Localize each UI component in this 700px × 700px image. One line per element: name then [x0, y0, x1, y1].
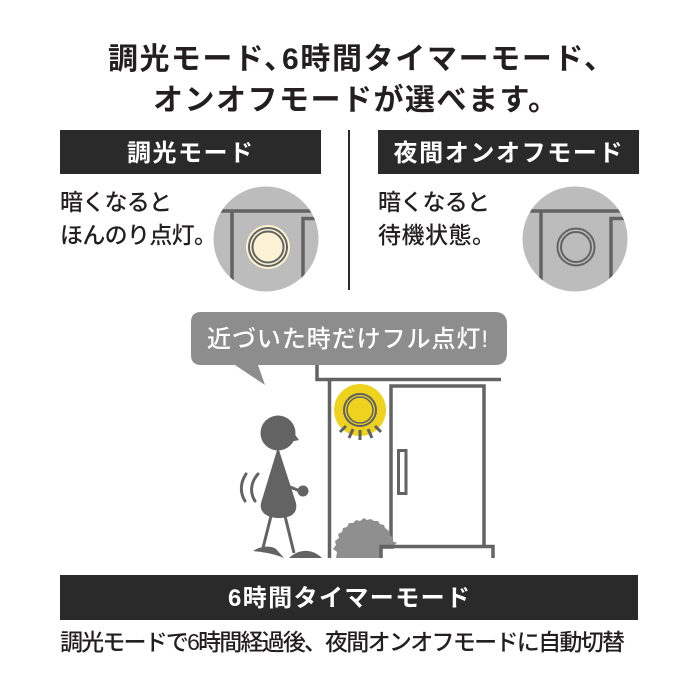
panel: dimming mode header: 調光モード: [127, 140, 253, 167]
text: night on/off description: 待機状態。: [378, 222, 495, 248]
panel: dimming mode header: [60, 130, 321, 174]
text: night on/off description: 暗くなると: [378, 189, 490, 215]
text: dimming mode description: 暗くなると: [60, 189, 172, 215]
panel: six hour timer mode header: [60, 575, 638, 620]
title: 6時間タイマーモード、: [282, 43, 614, 76]
infographic canvas: [60, 43, 639, 653]
panel: six hour timer mode header: 6時間タイマーモード: [228, 585, 470, 612]
text: six hour timer description: [60, 629, 625, 655]
title: オンオフモードが選べます。: [153, 83, 558, 117]
illustration: walking person: [241, 416, 322, 558]
speech bubble: [191, 312, 507, 385]
speech bubble: 近づいた時だけフル点灯!: [207, 326, 488, 353]
icon: dim light on wall: [214, 186, 318, 292]
title: [108, 43, 614, 117]
icon: standby light on wall: [522, 186, 628, 292]
title: 調光モード、: [108, 43, 294, 76]
illustration: shrub: [333, 518, 397, 558]
panel: night on/off mode header: 夜間オンオフモード: [394, 140, 622, 167]
text: six hour timer description: 夜間オンオフモードに自動切替: [325, 629, 625, 655]
text: six hour timer description: 調光モードで6時間経過後、: [60, 629, 327, 655]
panel: night on/off mode header: [378, 130, 639, 174]
vertical divider: [348, 130, 350, 290]
illustration: house entrance: [317, 365, 501, 558]
illustration: door step: [381, 546, 493, 558]
text: dimming mode description: ほんのり点灯。: [60, 222, 217, 248]
text: night on/off description: [378, 189, 495, 248]
text: dimming mode description: [60, 189, 217, 248]
icon: lit sensor light: [334, 384, 386, 440]
